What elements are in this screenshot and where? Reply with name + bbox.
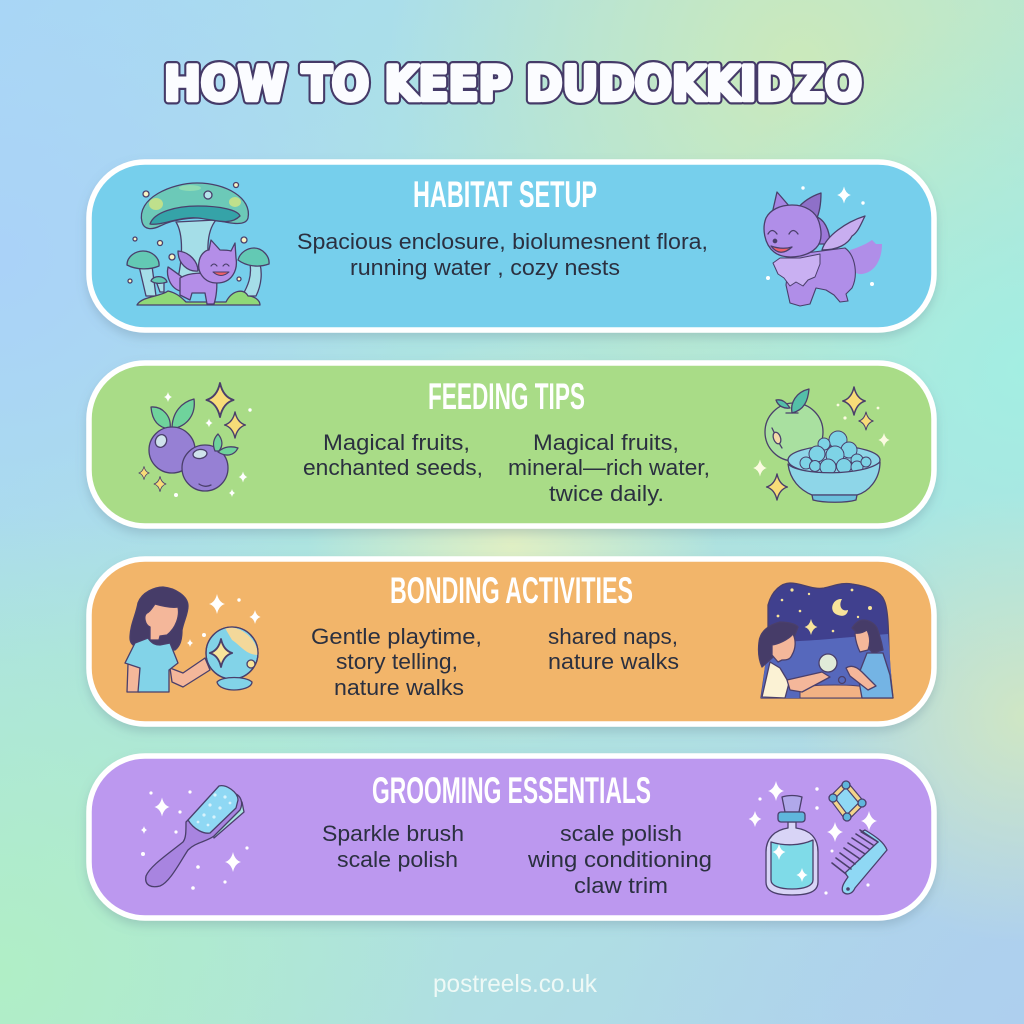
text block: bonding left column: nature walks <box>334 675 464 700</box>
text block: habitat description <box>297 229 708 280</box>
panel: bonding activities <box>89 559 934 724</box>
text block: grooming right column: wing conditioning <box>527 847 712 872</box>
text block: habitat description: running water , cozy nests <box>350 255 620 280</box>
icon: person with crystal ball <box>125 587 261 692</box>
panel: feeding tips <box>89 363 934 526</box>
footer: website: postreels.co.uk <box>433 970 597 998</box>
heading: bonding activities: BONDING ACTIVITIES <box>390 570 633 611</box>
icon: apple and bowl of blue orbs <box>753 387 890 502</box>
heading: feeding tips: FEEDING TIPS <box>428 376 585 417</box>
text block: feeding right column: twice daily. <box>549 481 664 506</box>
text block: grooming left column: Sparkle brush <box>322 821 464 846</box>
heading: grooming essentials: GROOMING ESSENTIALS <box>372 770 651 811</box>
panel: grooming essentials <box>89 756 934 918</box>
text block: feeding left column: enchanted seeds, <box>303 455 483 480</box>
icon: bottle, gem and comb <box>749 781 887 895</box>
text block: feeding right column: Magical fruits, <box>533 430 679 455</box>
text block: feeding right column: mineral—rich water, <box>508 455 710 480</box>
text block: bonding right column <box>548 624 679 674</box>
icon: two people at night table <box>758 583 893 698</box>
text block: habitat description: Spacious enclosure, biolumesnent flora, <box>297 229 708 254</box>
heading: habitat setup: HABITAT SETUP <box>413 174 597 215</box>
icon: mushrooms with winged creature <box>127 182 269 305</box>
text block: feeding right column <box>508 430 710 506</box>
text block: bonding right column: nature walks <box>548 649 679 674</box>
text block: grooming right column: claw trim <box>574 873 668 898</box>
text block: grooming left column <box>322 821 464 872</box>
icon: winged purple creature <box>764 186 882 306</box>
text block: feeding left column <box>303 430 483 480</box>
text block: grooming left column: scale polish <box>337 847 458 872</box>
text block: bonding right column: shared naps, <box>548 624 678 649</box>
text block: feeding left column: Magical fruits, <box>323 430 470 455</box>
title: HOW TO KEEP DUDOKKIDZO <box>164 57 862 112</box>
text block: grooming right column: scale polish <box>560 821 682 846</box>
text block: grooming right column <box>527 821 712 898</box>
text block: bonding left column <box>311 624 482 700</box>
text block: bonding left column: story telling, <box>336 649 458 674</box>
panel: habitat setup <box>89 162 934 330</box>
text block: bonding left column: Gentle playtime, <box>311 624 482 649</box>
title: HOW TO KEEP DUDOKKIDZO <box>164 57 862 112</box>
icon: sparkle brush <box>141 786 249 890</box>
icon: purple fruits with sparkles <box>139 383 252 497</box>
